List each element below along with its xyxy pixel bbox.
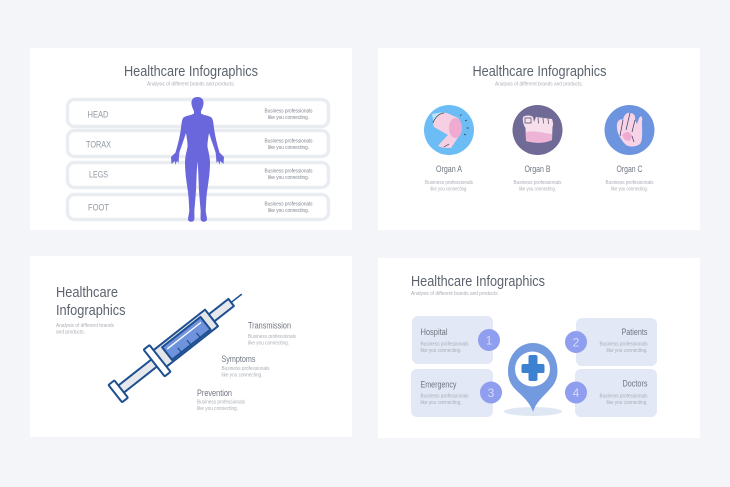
card: emergency: like you connecting. — [420, 400, 462, 406]
row: head: like you connecting. — [268, 115, 309, 121]
card: emergency: Emergency — [420, 380, 457, 390]
icon: hand — [604, 105, 654, 155]
text: prevention: Prevention — [197, 388, 232, 399]
heading — [56, 284, 126, 319]
card: patients: 2 — [573, 336, 580, 350]
panel: human body — [30, 48, 352, 230]
organ C: like you connecting. — [611, 186, 648, 192]
row: legs: Business professionals — [264, 168, 313, 174]
text: symptoms — [222, 354, 270, 378]
card: patients: Business professionals — [600, 342, 648, 348]
row: legs: like you connecting. — [268, 175, 309, 181]
row: torax — [68, 130, 328, 156]
text: transmission: Business professionals — [248, 334, 296, 340]
row: legs: LEGS — [89, 170, 108, 180]
row: head — [68, 100, 328, 126]
text: prevention: like you connecting. — [197, 406, 238, 412]
row: torax: TORAX — [86, 140, 112, 150]
card: hospital: 1 — [486, 334, 493, 348]
text: symptoms: Business professionals — [222, 366, 270, 372]
card: doctors: Business professionals — [600, 394, 648, 400]
subheading: Analysis of different brands — [56, 323, 114, 329]
subheading: and products. — [56, 330, 85, 336]
panel: syringe — [30, 256, 352, 437]
subheading: Analysis of different brands and products. — [495, 82, 583, 88]
card: doctors: 4 — [573, 386, 580, 400]
row: head: HEAD — [88, 110, 109, 120]
text: transmission — [248, 320, 296, 346]
label: Organ C — [616, 164, 643, 175]
heading: Healthcare — [56, 284, 118, 301]
organ C — [604, 105, 654, 192]
subheading: Analysis of different brands and products. — [147, 82, 235, 88]
icon: foot — [512, 105, 562, 155]
text: symptoms: Symptoms — [222, 354, 256, 365]
text: transmission: Transmission — [248, 320, 291, 332]
organ A — [424, 105, 474, 192]
icon: knee — [424, 105, 474, 155]
card: emergency: Business professionals — [420, 394, 469, 400]
card: emergency — [411, 369, 502, 417]
row: torax: like you connecting. — [268, 145, 309, 151]
icon: syringe — [105, 281, 252, 407]
row: foot: FOOT — [88, 202, 109, 214]
row: foot — [68, 194, 328, 220]
card: doctors: like you connecting. — [606, 400, 648, 406]
card: hospital: Business professionals — [420, 342, 469, 348]
icon: map pin — [504, 343, 562, 416]
card: hospital: like you connecting. — [420, 348, 462, 354]
row: legs — [68, 162, 328, 188]
description: Business professionals — [425, 180, 473, 186]
heading: Healthcare Infographics — [124, 63, 258, 80]
text: prevention: Business professionals — [197, 400, 245, 406]
row: torax: Business professionals — [264, 138, 313, 144]
subheading — [56, 323, 114, 336]
row: foot: like you connecting. — [268, 208, 309, 214]
organ A: like you connecting. — [430, 186, 468, 192]
text: transmission: like you connecting. — [248, 340, 289, 346]
panel: location — [378, 258, 700, 438]
heading: Healthcare Infographics — [472, 63, 606, 80]
row: head: Business professionals — [264, 108, 313, 114]
organ B — [512, 105, 562, 192]
subheading: Analysis of different brands and products. — [411, 291, 499, 297]
card: patients — [565, 318, 657, 366]
label: Organ A — [436, 164, 462, 175]
card: emergency: 3 — [488, 386, 495, 400]
text: symptoms: like you connecting. — [222, 372, 263, 378]
card: doctors — [565, 369, 657, 417]
text: prevention — [197, 388, 245, 412]
icon: human silhouette — [171, 97, 224, 222]
card: doctors: Doctors — [622, 378, 648, 390]
description: Business professionals — [514, 180, 562, 186]
card: hospital: Hospital — [420, 327, 448, 338]
card: patients: like you connecting. — [606, 348, 648, 354]
heading: Infographics — [56, 302, 126, 319]
panel: organs — [378, 48, 700, 230]
description: Business professionals — [606, 180, 654, 186]
heading: Healthcare Infographics — [411, 273, 545, 290]
card: patients: Patients — [622, 327, 648, 338]
card: hospital — [412, 316, 500, 364]
label: Organ B — [524, 164, 550, 175]
organ B: like you connecting. — [519, 186, 556, 192]
row: foot: Business professionals — [264, 202, 313, 208]
